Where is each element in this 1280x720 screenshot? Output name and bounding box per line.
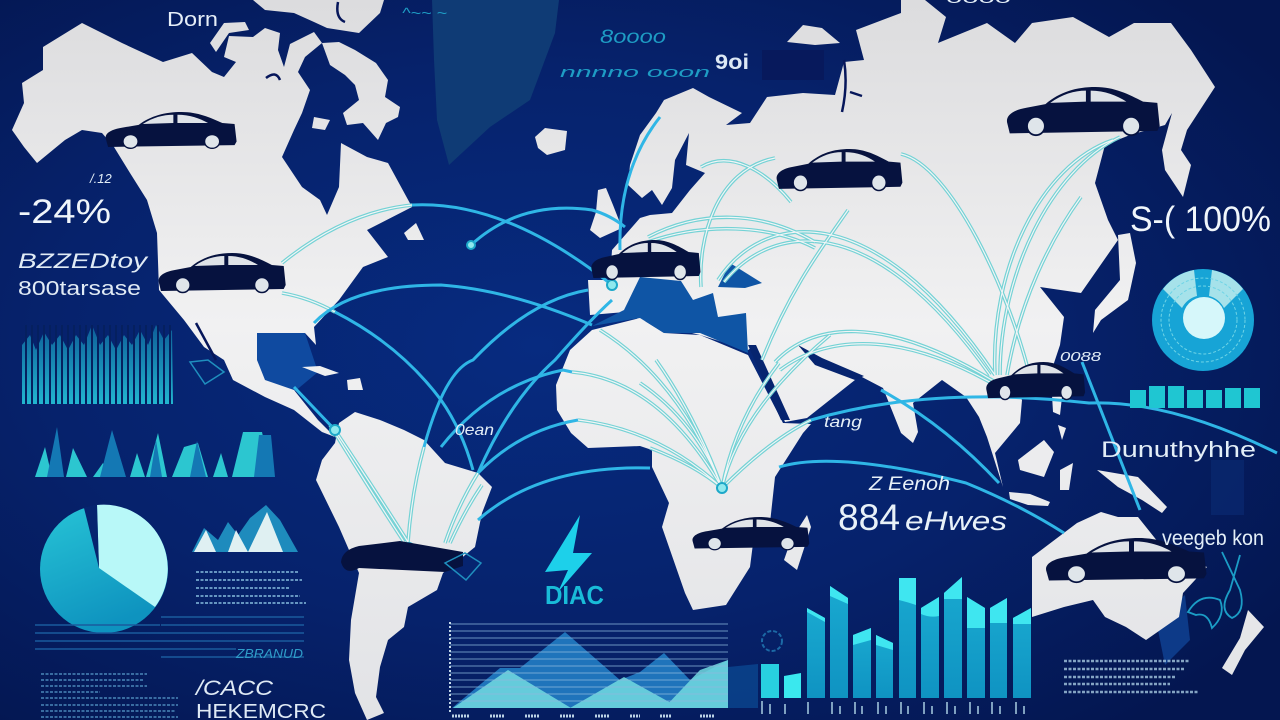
small note above stat: /.12 [89, 171, 112, 186]
lightning icon with label: DIAC [545, 580, 604, 610]
right small label: veegeb kon [1162, 527, 1264, 550]
big bar chart [761, 577, 1031, 714]
left label block: 800tarsase [18, 278, 141, 300]
ocean labels: 0088 [1060, 349, 1102, 364]
New Zealand [1222, 610, 1264, 675]
Greenland [432, 0, 559, 165]
Newfoundland [404, 223, 424, 240]
Black Sea [718, 263, 762, 288]
top cyan scribble labels: 8oooo [600, 27, 666, 48]
top cyan scribble labels [402, 5, 710, 81]
center stat: eHwes [905, 506, 1007, 536]
car: Australia [1046, 538, 1206, 582]
Caribbean islands [302, 366, 363, 390]
ocean labels: tang [824, 414, 862, 431]
bottom left labels [194, 677, 326, 720]
footnote text [41, 674, 178, 717]
cyan arcs over ocean [294, 117, 1277, 533]
hub nodes [330, 241, 1003, 553]
Red Sea [748, 345, 790, 420]
right decorative cyan marks [1188, 552, 1242, 628]
car: Southeast Asia [986, 362, 1085, 400]
car icons [106, 87, 1206, 582]
Arctic island: crescent [210, 22, 249, 52]
right mini bar strip [1130, 386, 1260, 408]
small area chart [192, 505, 298, 552]
horizontal rule bands [35, 617, 304, 657]
label: 9oi: 9oi [715, 51, 749, 74]
Novaya Zemlya [787, 25, 840, 45]
south Pacific tint [1156, 595, 1190, 665]
label: Dom: Dorn [167, 9, 218, 31]
left label block: BZZEDtoy [18, 250, 149, 273]
Sulawesi [1060, 463, 1073, 490]
Gulf of Mexico tint [257, 333, 318, 392]
Australia [1032, 512, 1207, 640]
Mediterranean Sea [592, 277, 748, 353]
right stat 100%: S-( 100% [1130, 200, 1271, 239]
Japan [1093, 233, 1136, 333]
land inlets [196, 2, 862, 360]
car: Russia east [1007, 87, 1160, 135]
small text block [196, 572, 306, 603]
Africa [556, 318, 811, 610]
right dim panel [1211, 460, 1244, 515]
spike chart left [35, 427, 275, 477]
bottom right text [1064, 661, 1199, 692]
Philippines [1052, 395, 1066, 440]
pie chart [40, 504, 168, 633]
left stat 24%: -24% [18, 193, 111, 231]
Eurasia [588, 0, 1215, 487]
lightning icon with label [545, 515, 604, 610]
teal arcs on land [282, 137, 1120, 543]
bottom left labels: /CACC [194, 677, 274, 700]
top cyan scribble labels: nnnno ooon [560, 64, 710, 81]
Madagascar [784, 515, 811, 570]
car: USA [159, 253, 286, 292]
ocean labels [455, 349, 1102, 439]
center stat: 884 [838, 497, 900, 538]
New Guinea [1097, 470, 1167, 513]
South America [316, 412, 492, 720]
North America [12, 23, 412, 437]
Iceland [535, 128, 567, 155]
right label: Dunuthyhhe [1101, 437, 1256, 462]
center stat [838, 474, 1007, 538]
right ring gauge [1152, 269, 1254, 371]
Arctic islet [312, 117, 330, 130]
blue chart caption: ZBRANUD [235, 646, 303, 661]
Persian Gulf [798, 345, 864, 380]
Borneo [1018, 440, 1054, 477]
center stat: Z Eenoh [868, 474, 950, 495]
car: Europe [591, 240, 700, 280]
British Isles [590, 188, 622, 238]
Arctic islands: north [253, 0, 384, 33]
ocean labels: 0ean [455, 422, 494, 439]
arc highlights [282, 137, 1120, 543]
car: Africa [692, 517, 809, 550]
decorative diamonds [190, 360, 481, 580]
Arctic dark panel [762, 50, 824, 80]
car: Russia west [777, 149, 902, 190]
top cyan scribble labels: ^~~ ~ [402, 5, 447, 22]
car: Canada [106, 112, 237, 148]
bar chart left [22, 325, 173, 404]
Java [1009, 492, 1050, 506]
left label block [18, 250, 149, 300]
car: South America [341, 541, 463, 572]
bottom center area chart [450, 622, 758, 716]
Arctic island: Baffin [322, 42, 400, 140]
